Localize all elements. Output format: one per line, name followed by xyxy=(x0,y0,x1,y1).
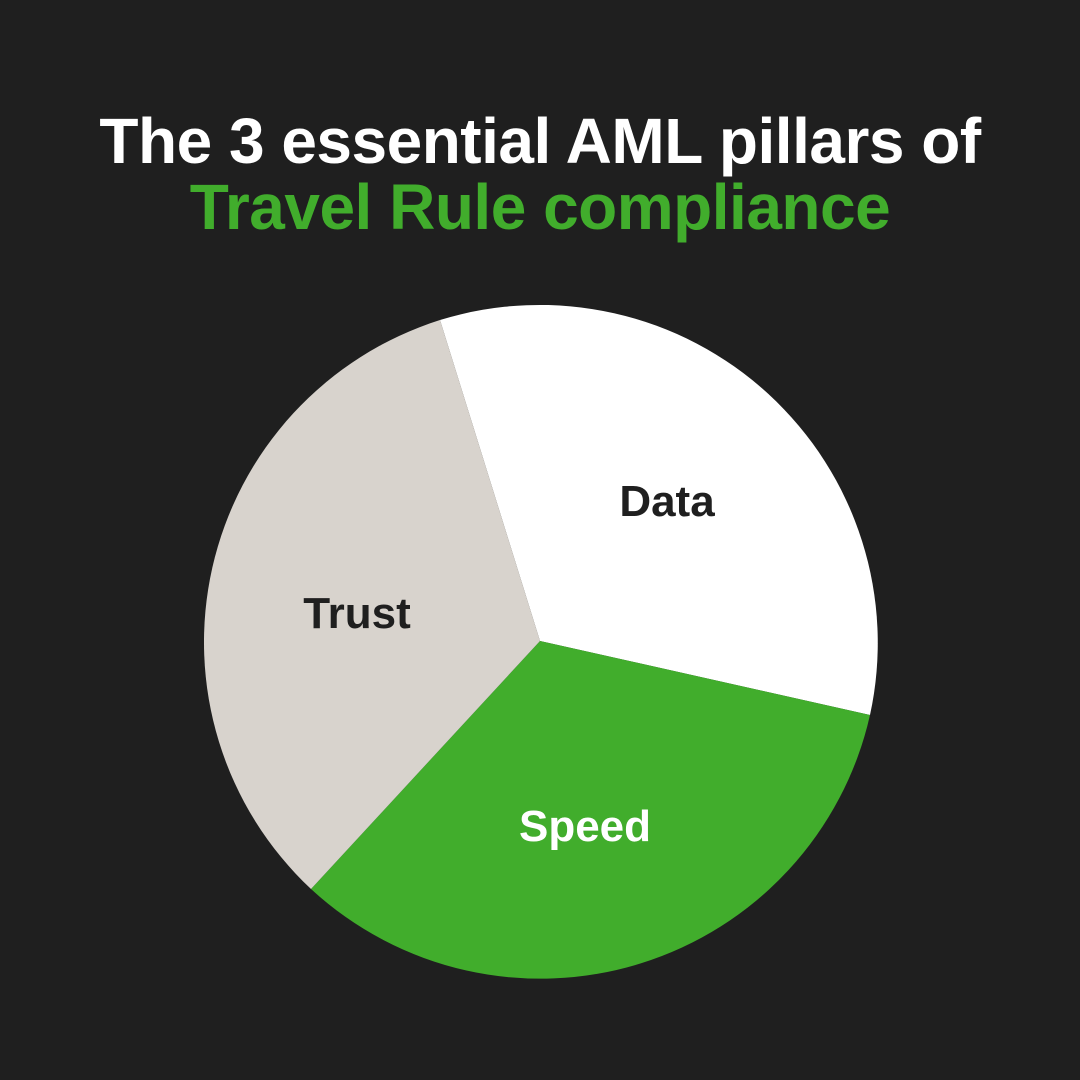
title: The 3 essential AML pillars of xyxy=(99,105,981,177)
slice: Data xyxy=(440,305,878,715)
slice: Data: Data xyxy=(619,477,715,526)
slice: Speed xyxy=(311,641,870,979)
title xyxy=(99,105,982,243)
slice: Trust: Trust xyxy=(303,589,411,638)
slice: Trust xyxy=(204,320,540,889)
slice: Speed: Speed xyxy=(519,802,651,851)
title: Travel Rule compliance xyxy=(190,171,890,243)
